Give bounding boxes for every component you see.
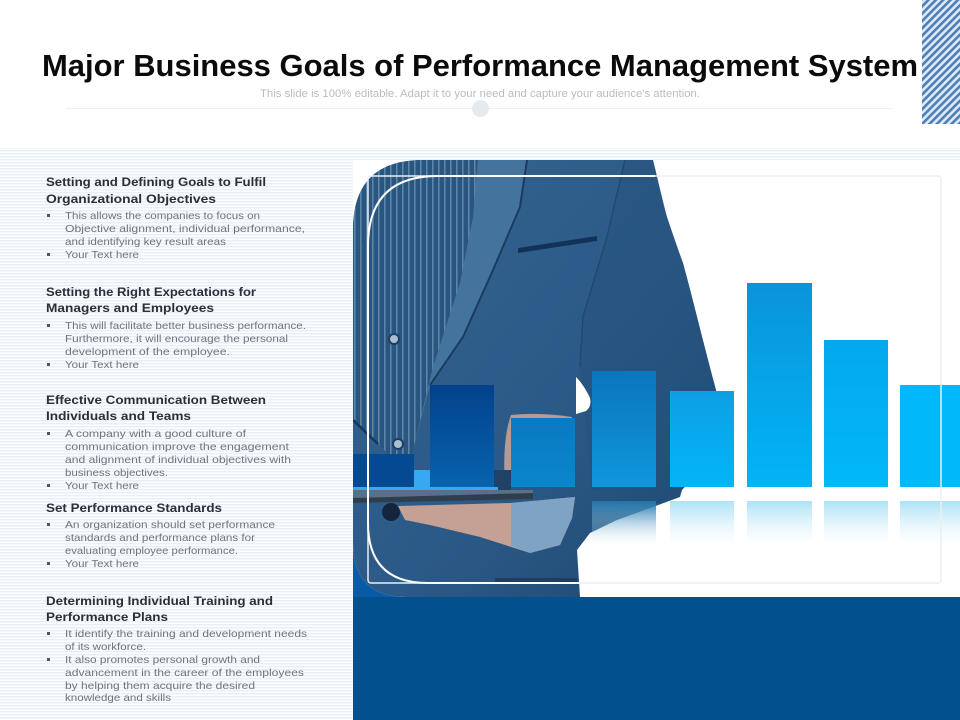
text block: goal 4 (46, 501, 275, 570)
dark sleeve beside hand (494, 470, 511, 490)
text block: goal 5: of its workforce. (65, 641, 146, 653)
text block: goal 1: Objective alignment, individual performance, (65, 223, 305, 235)
title divider with dot (66, 100, 893, 117)
panel background stripes (0, 148, 960, 720)
text block: goal 3 (46, 393, 291, 492)
text block: goal 4: An organization should set performance (65, 519, 275, 531)
subtitle: This slide is 100% editable. Adapt it to your need and capture your audience's attention. (260, 88, 700, 100)
text block: goal 4: evaluating employee performance. (65, 545, 238, 557)
blue overlay on hand (511, 497, 575, 553)
text block: goal 5: It also promotes personal growth and (65, 654, 260, 666)
text block: goal 3: business objectives. (65, 467, 168, 479)
cuff shadow (382, 503, 400, 521)
text block: goal 2: Your Text here (65, 359, 139, 371)
text block: goal 2: Managers and Employees (46, 301, 214, 315)
text block: goal 4: Set Performance Standards (46, 501, 222, 515)
hand behind bar (504, 414, 572, 470)
text block: goal 3: and alignment of individual objectives with (65, 454, 291, 466)
corner striped block (922, 0, 960, 124)
text block: goal 1: This allows the companies to focus on (65, 210, 260, 222)
text block: goal 2: This will facilitate better business performance. (65, 320, 306, 332)
text block: goal 1 (46, 175, 305, 261)
lapel (413, 160, 527, 450)
shirt buttons (389, 334, 403, 449)
text block: goal 4: standards and performance plans for (65, 532, 256, 544)
text block: goal 1: Organizational Objectives (46, 192, 216, 206)
sleeve seam (580, 160, 625, 367)
text block: goal 2: Setting the Right Expectations for (46, 285, 256, 299)
text block: goal 2: development of the employee. (65, 346, 230, 358)
lapel dark edge (430, 160, 527, 385)
photo: businessman in suit (353, 160, 960, 597)
text block: goal 4: Your Text here (65, 558, 139, 570)
jacket front edge (353, 420, 378, 444)
bar chart reflections (592, 501, 960, 540)
bottom hem (495, 578, 577, 582)
jacket (353, 160, 718, 597)
hand below tablet (398, 497, 575, 553)
text block: goal 5 (46, 594, 307, 704)
text block: goal 5: Performance Plans (46, 610, 168, 624)
text block: goal 3: Effective Communication Between (46, 393, 266, 407)
text block: goal 1: and identifying key result areas (65, 236, 226, 248)
text block: goal 2 (46, 285, 306, 371)
text block: goal 3: communication improve the engagement (65, 441, 289, 453)
text block: goal 3: Individuals and Teams (46, 409, 191, 423)
white gap by the arm (576, 377, 590, 414)
navy base panel (353, 530, 960, 720)
text block: goal 2: Furthermore, it will encourage the personal (65, 333, 288, 345)
text block: goal 1: Setting and Defining Goals to Fulfil (46, 175, 266, 189)
text block: goal 5: advancement in the career of the employees (65, 667, 304, 679)
text block: goal 3: A company with a good culture of (65, 428, 246, 440)
sleeve shade (653, 160, 716, 490)
text block: goal 5: Determining Individual Training and (46, 594, 273, 608)
bar chart (353, 283, 960, 487)
text block: goal 5: by helping them acquire the desired (65, 680, 255, 692)
text block: goal 5: It identify the training and development needs (65, 628, 307, 640)
pocket (518, 236, 597, 253)
light strip behind bars (353, 470, 498, 490)
text block: goal 5: knowledge and skills (65, 692, 171, 704)
title: Major Business Goals of Performance Management System (42, 48, 918, 83)
text block: goal 3: Your Text here (65, 480, 139, 492)
rounded frame outline (368, 176, 941, 583)
shirt with stripes (353, 160, 478, 470)
tablet (353, 490, 533, 503)
text block: goal 1: Your Text here (65, 249, 139, 261)
